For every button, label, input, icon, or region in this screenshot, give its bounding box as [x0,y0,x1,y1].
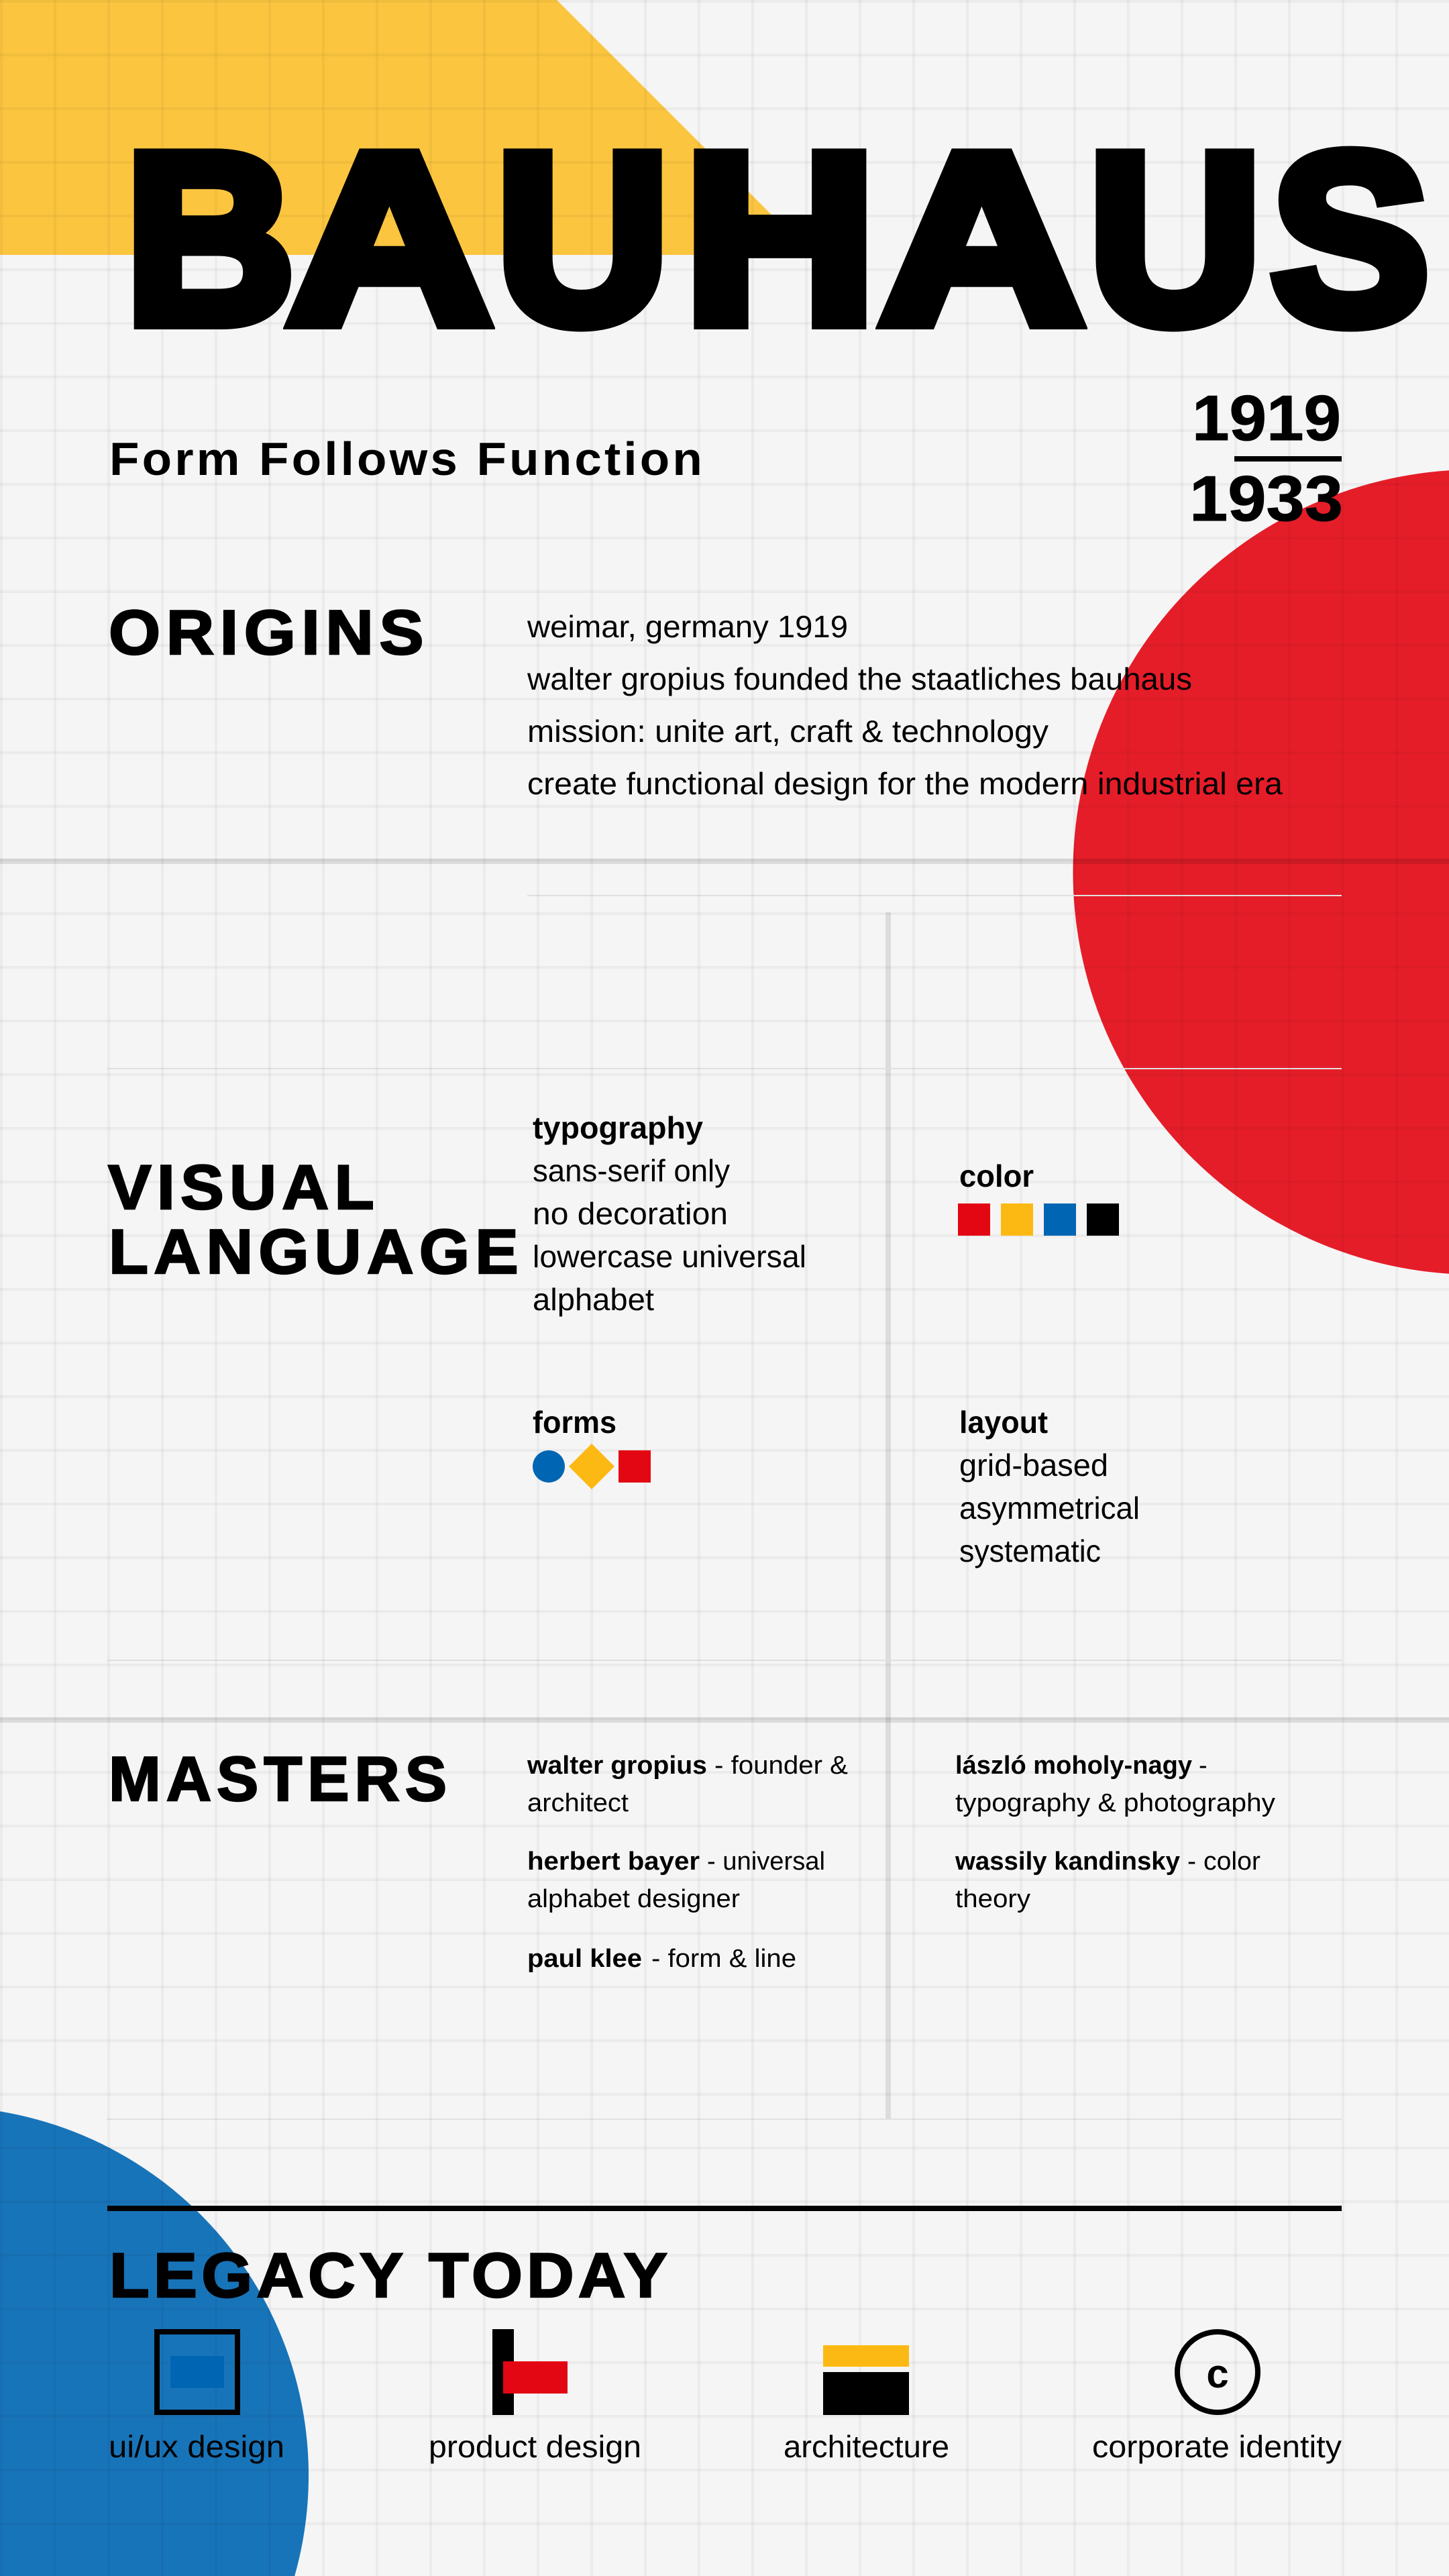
layout block: asymmetrical [959,1491,1140,1525]
master: walter gropius [527,1752,848,1817]
icon: product lamp [492,2329,568,2415]
master: wassily kandinsky: theory [955,1885,1030,1913]
master: walter gropius: walter gropius [527,1752,707,1780]
heading: masters: MASTERS [109,1743,452,1814]
title: A [880,104,1083,374]
color block [958,1159,1119,1236]
master: wassily kandinsky [955,1847,1260,1913]
origins text [527,609,1283,801]
master: herbert bayer: herbert bayer [527,1847,700,1876]
panel: visual language [108,1110,1140,1568]
typography block: sans-serif only [533,1153,730,1188]
form shapes [533,1444,651,1489]
origins text: walter gropius founded the staatliches bauhaus [527,661,1192,696]
years: 1919 [1192,382,1341,454]
typography block: typography [533,1110,703,1145]
panel: legacy today [107,2206,1342,2464]
typography block: no decoration [533,1196,728,1231]
color swatches [958,1203,1119,1236]
origins text: create functional design for the modern industrial era [527,766,1283,801]
icon: building [823,2345,909,2415]
master: herbert bayer: alphabet designer [527,1885,740,1913]
title: A [288,104,491,374]
typography block: lowercase universal [533,1239,806,1274]
typography block: alphabet [533,1282,654,1317]
color block: color [959,1159,1034,1193]
master: laszlo moholy-nagy [955,1752,1275,1817]
master: laszlo moholy-nagy: typography & photography [955,1789,1275,1817]
item: ui/ux design [109,2332,284,2464]
title: U [496,104,669,374]
blue circle [0,2111,309,2576]
title: B [125,104,294,374]
item: corporate identity [1092,2332,1342,2464]
item: architecture [784,2345,949,2464]
item: architecture: architecture [784,2429,949,2464]
master: laszlo moholy-nagy: lászló moholy-nagy [955,1752,1192,1780]
icon: ui window [157,2332,237,2412]
layout block: grid-based [959,1448,1108,1483]
title [125,104,1429,374]
years [1189,382,1343,535]
master: herbert bayer [527,1847,825,1913]
years: 1933 [1189,463,1343,535]
yellow corner shape [0,0,812,255]
title: S [1271,104,1429,374]
icon: logo circle: c [1206,2351,1229,2396]
item: corporate identity: corporate identity [1092,2429,1342,2464]
legacy rule [107,2206,1342,2211]
master: walter gropius: - founder & [714,1752,848,1780]
heading: origins: ORIGINS [109,597,429,667]
master: herbert bayer: - universal [707,1847,825,1876]
item: product design [429,2329,641,2464]
master: paul klee [527,1945,796,1973]
master: paul klee: - form & line [651,1945,796,1973]
panel: origins [109,597,1283,801]
origins text: weimar, germany 1919 [527,609,848,644]
origins text: mission: unite art, craft & technology [527,714,1049,749]
panel: masters [109,1743,1275,1973]
typography block [533,1110,806,1317]
forms block [533,1405,651,1489]
master: laszlo moholy-nagy: - [1199,1752,1208,1780]
master: walter gropius: architect [527,1789,629,1817]
title: U [1089,104,1261,374]
red circle [1073,470,1449,1274]
subtitle: Form Follows Function [109,433,705,485]
master: wassily kandinsky: - color [1187,1847,1260,1876]
layout block: layout [959,1405,1048,1440]
master: paul klee: paul klee [527,1945,642,1973]
layout block: systematic [959,1534,1101,1568]
heading: visual language [108,1152,524,1287]
icon: logo circle [1177,2332,1258,2412]
item: product design: product design [429,2429,641,2464]
item: ui/ux design: ui/ux design [109,2429,284,2464]
layout block [959,1405,1140,1568]
heading: legacy today: LEGACY TODAY [109,2240,672,2310]
title: H [684,104,876,374]
heading: visual language: LANGUAGE [109,1216,524,1287]
heading: visual language: VISUAL [108,1152,380,1222]
forms block: forms [533,1405,616,1440]
master: wassily kandinsky: wassily kandinsky [955,1847,1180,1876]
